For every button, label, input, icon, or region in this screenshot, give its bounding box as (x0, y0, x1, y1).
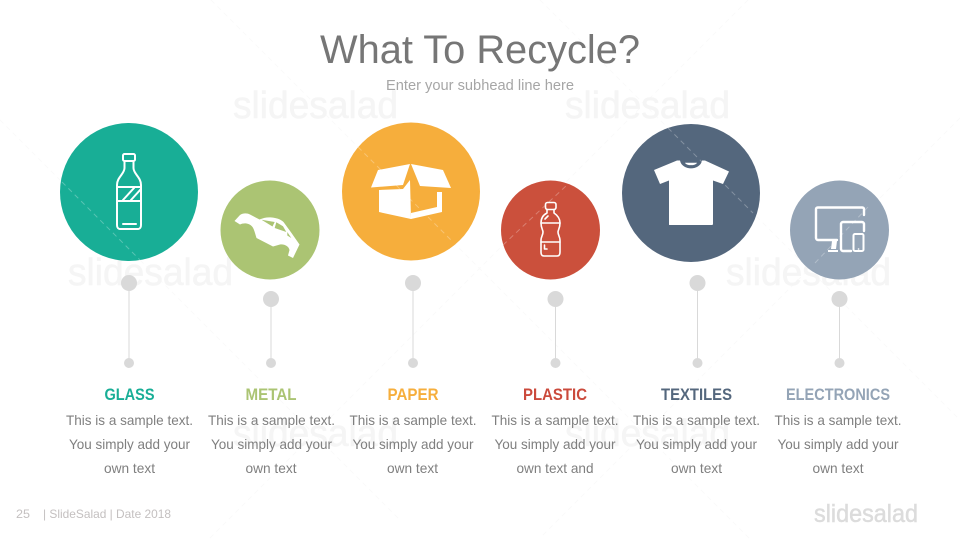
text: textiles (633, 412, 760, 476)
metal circle (220, 180, 320, 280)
text: plastic: You simply add your (494, 436, 616, 452)
connector: textiles (690, 275, 706, 368)
icon: plastic bottle (541, 202, 560, 256)
text: metal: You simply add your (211, 436, 332, 452)
icon: devices (816, 208, 864, 252)
text: glass: own text (104, 460, 155, 476)
footer: page number and date: 25 (16, 507, 30, 521)
text: textiles: This is a sample text. (633, 412, 760, 428)
watermark background: slidesalad (726, 252, 891, 294)
paper circle (342, 122, 480, 260)
text: plastic (492, 412, 618, 476)
watermark background: slidesalad (233, 413, 398, 455)
text: plastic: own text and (516, 460, 594, 476)
text: plastic: This is a sample text. (492, 412, 618, 428)
text: glass: This is a sample text. (66, 412, 193, 428)
text: paper: You simply add your (352, 436, 474, 452)
text: electronics (774, 412, 902, 476)
text: metal: This is a sample text. (208, 412, 335, 428)
icon: glass bottle (117, 154, 141, 229)
connector: plastic (548, 291, 564, 368)
heading: paper: PAPER (388, 385, 438, 404)
connector: electronics (832, 291, 848, 368)
text: glass: You simply add your (69, 436, 190, 452)
connector: paper (405, 275, 421, 368)
panel: plastic (492, 180, 618, 476)
watermark background: slidesalad (233, 85, 398, 127)
text: electronics: This is a sample text. (774, 412, 902, 428)
text: metal: own text (246, 460, 297, 476)
footer logo: slidesalad (814, 500, 918, 528)
watermark background: slidesalad (565, 85, 730, 127)
heading: textiles: TEXTILES (661, 385, 732, 404)
icon: open box (371, 164, 451, 219)
icon: t-shirt (654, 160, 729, 225)
text: paper (350, 412, 476, 476)
title: What To Recycle? (320, 28, 640, 72)
dashed diagonals over circles (62, 128, 868, 263)
plastic circle (501, 180, 600, 280)
heading: glass: GLASS (104, 385, 154, 404)
footer: page number and date: | SlideSalad | Date 2018 (43, 507, 171, 521)
heading: electronics: ELECTRONICS (786, 385, 890, 404)
glass circle (60, 123, 198, 261)
text: paper: This is a sample text. (350, 412, 476, 428)
watermark background: slidesalad (565, 413, 730, 455)
textiles circle (622, 124, 760, 262)
text: glass (66, 412, 193, 476)
heading: plastic: PLASTIC (523, 385, 587, 404)
text: metal (208, 412, 335, 476)
text: electronics: own text (812, 460, 864, 476)
subtitle: Enter your subhead line here (386, 77, 574, 94)
electronics circle (790, 180, 889, 280)
text: paper: own text (387, 460, 438, 476)
watermark background: slidesalad (68, 252, 233, 294)
text: electronics: You simply add your (778, 436, 899, 452)
connector: glass (121, 275, 137, 368)
panel: textiles (622, 124, 760, 476)
panel: electronics (774, 180, 902, 476)
icon: car (234, 213, 300, 258)
panel: paper (342, 122, 480, 476)
panel: glass (60, 123, 198, 476)
text: textiles: own text (671, 460, 722, 476)
text: textiles: You simply add your (636, 436, 757, 452)
heading: metal: METAL (246, 385, 296, 404)
panel: metal (208, 180, 335, 476)
connector: metal (263, 291, 279, 368)
